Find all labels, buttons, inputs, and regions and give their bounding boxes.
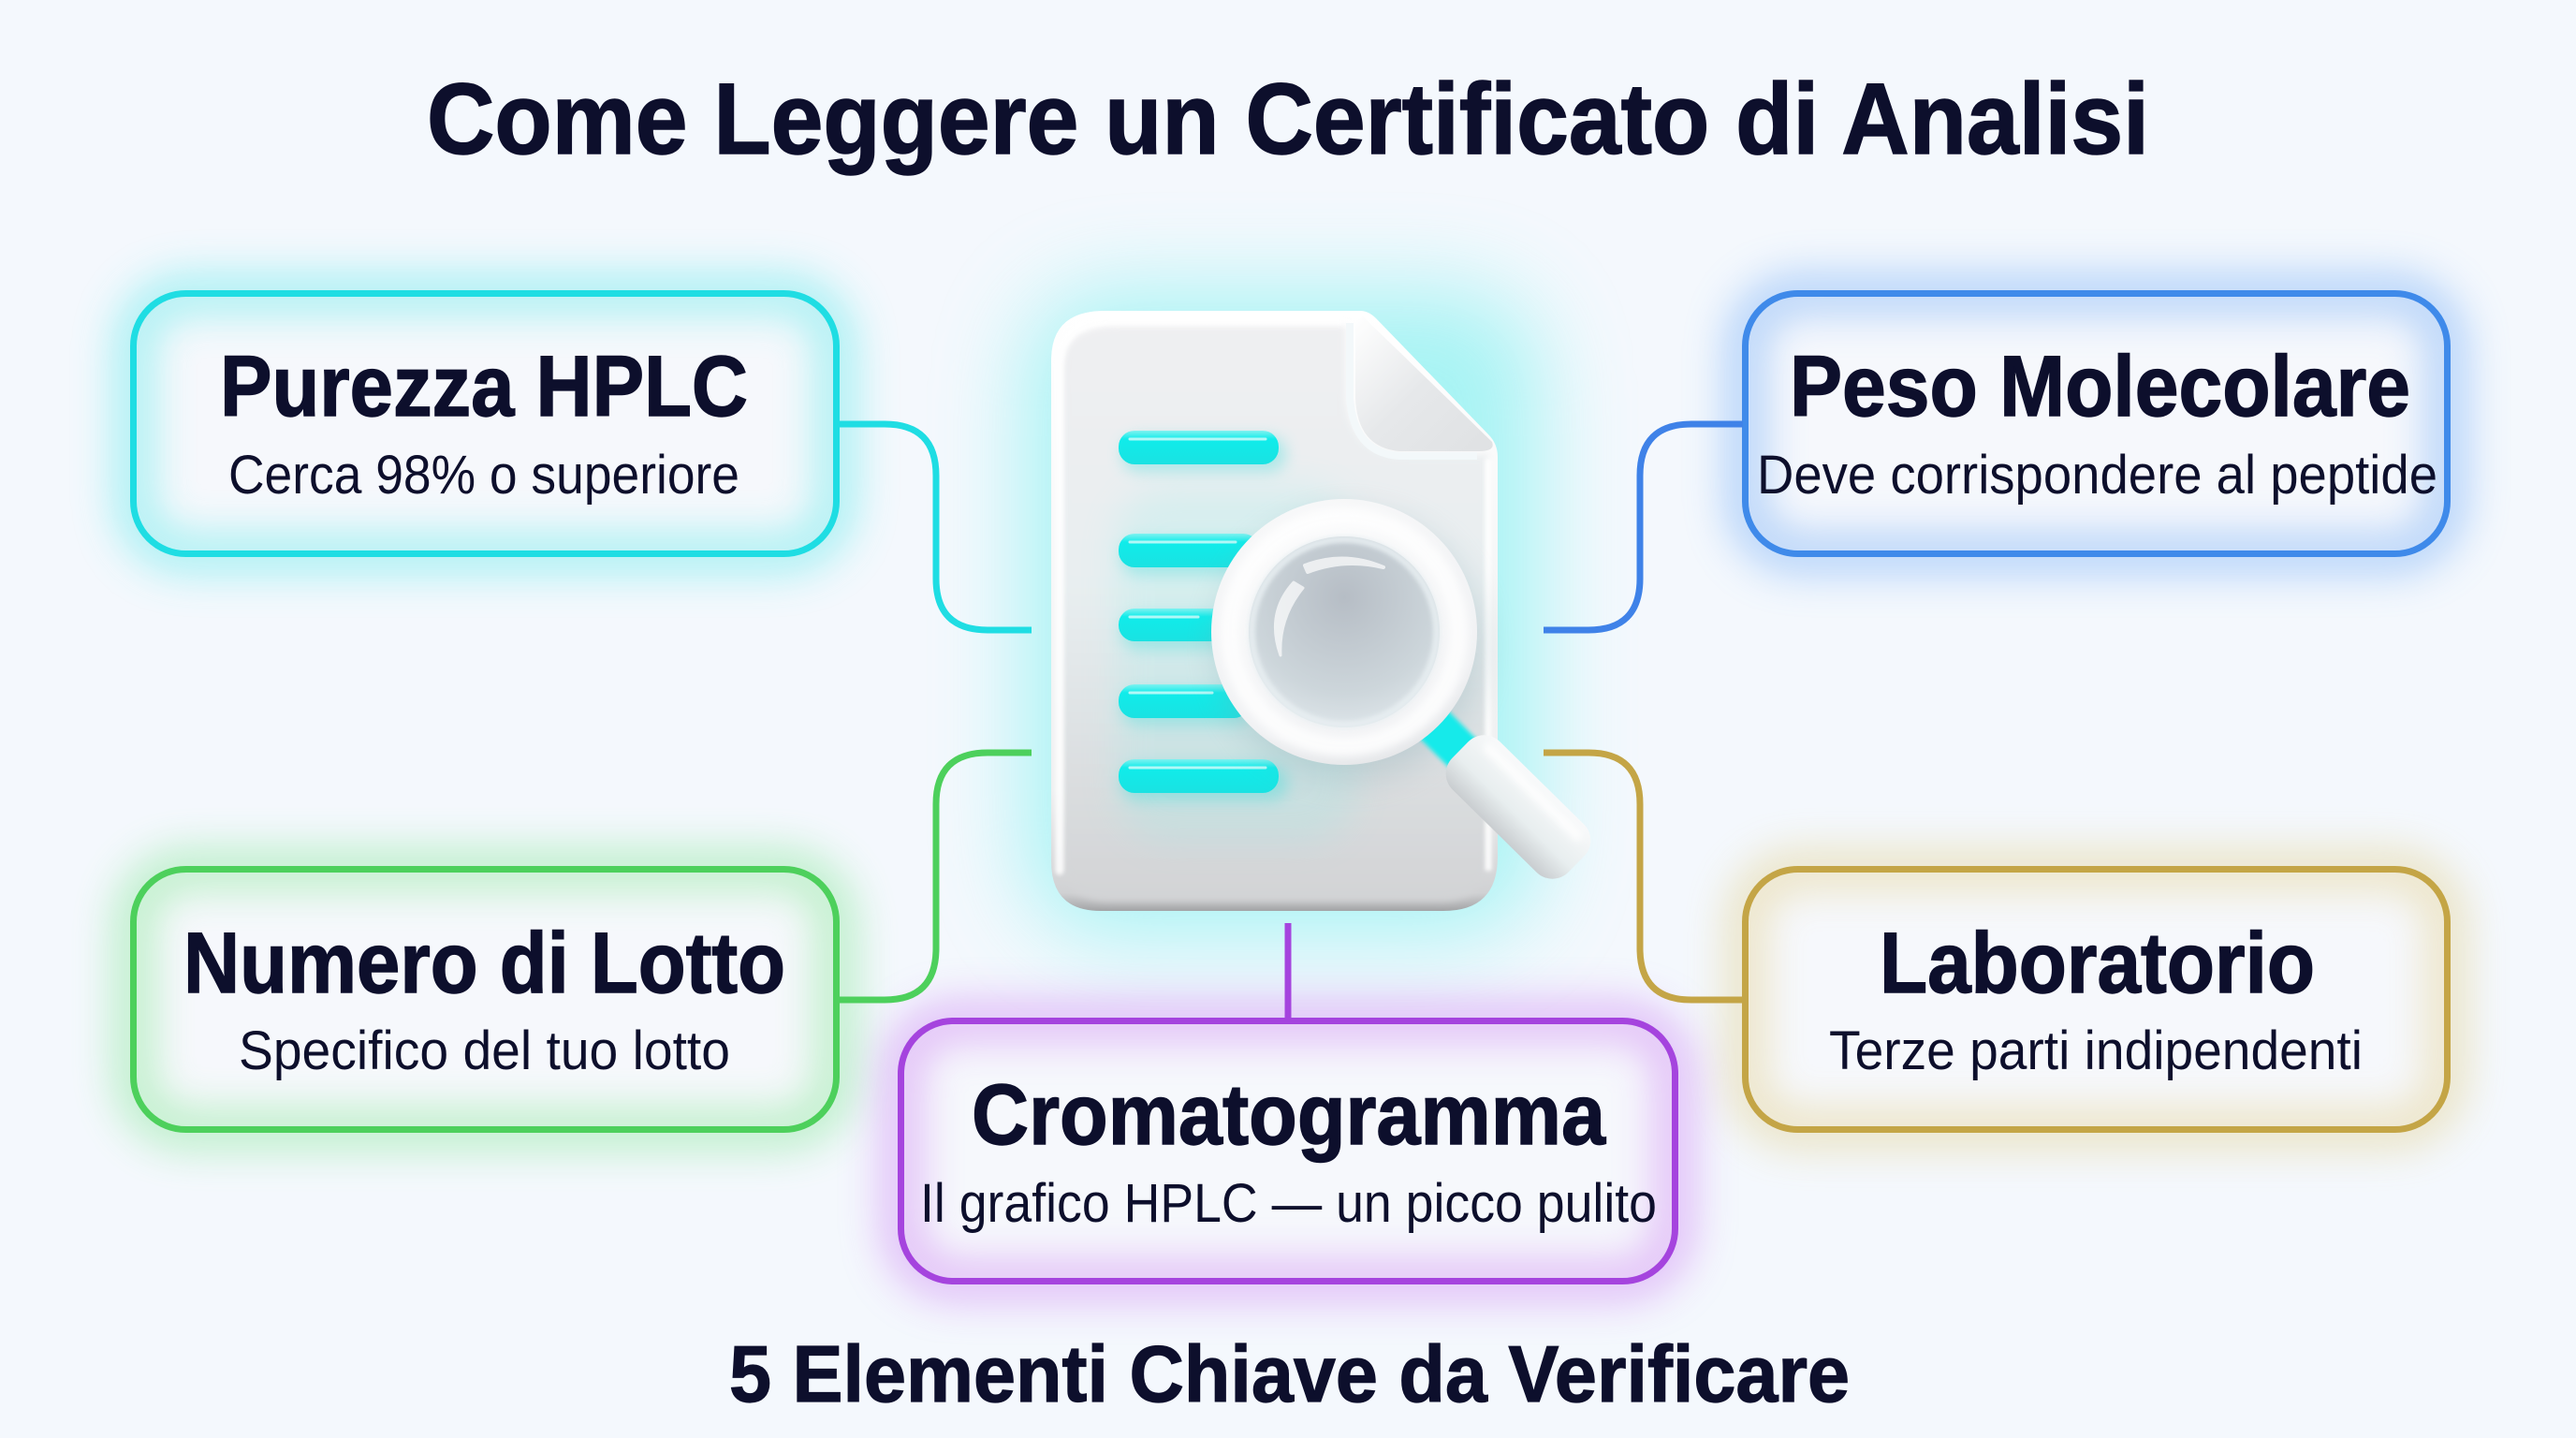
panel: Cromatogramma bbox=[900, 1020, 1676, 1281]
text: Specifico del tuo lotto: Specifico del tuo lotto bbox=[239, 1020, 730, 1081]
document body bbox=[1051, 311, 1498, 911]
magnifier handle bbox=[1437, 726, 1600, 888]
magnifier shadow bbox=[1217, 513, 1483, 779]
heading: Laboratorio: Laboratorio bbox=[1880, 916, 2315, 1011]
connector: Purezza HPLC bbox=[840, 424, 1032, 630]
panel: Numero di Lotto bbox=[133, 869, 837, 1129]
icon: document with magnifying glass bbox=[1051, 311, 1600, 911]
page fold bbox=[1355, 316, 1493, 451]
heading: Numero di Lotto: Numero di Lotto bbox=[183, 916, 785, 1011]
magnifier neck bbox=[1432, 723, 1466, 756]
subtitle: 5 Elementi Chiave da Verificare bbox=[729, 1330, 1850, 1419]
panel: Purezza HPLC bbox=[133, 294, 837, 554]
right highlight bbox=[1485, 459, 1492, 871]
connector: Laboratorio bbox=[1544, 753, 1743, 1000]
line 1 glow bbox=[1121, 436, 1286, 472]
text: Il grafico HPLC — un picco pulito: Il grafico HPLC — un picco pulito bbox=[920, 1173, 1657, 1234]
heading: Purezza HPLC: Purezza HPLC bbox=[220, 339, 748, 434]
document lines bbox=[1119, 431, 1288, 800]
connector: Numero di Lotto bbox=[840, 753, 1032, 1000]
panel: Peso Molecolare bbox=[1745, 294, 2447, 554]
heading: Cromatogramma: Cromatogramma bbox=[972, 1067, 1606, 1163]
left and top highlights bbox=[1060, 320, 1340, 871]
title: Come Leggere un Certificato di Analisi bbox=[427, 62, 2149, 175]
connector: Cromatogramma bbox=[1284, 923, 1292, 1018]
text: Deve corrispondere al peptide: Deve corrispondere al peptide bbox=[1757, 445, 2437, 506]
heading: Peso Molecolare: Peso Molecolare bbox=[1790, 339, 2410, 434]
text: Cerca 98% o superiore: Cerca 98% o superiore bbox=[228, 445, 739, 506]
panel: Laboratorio bbox=[1745, 869, 2447, 1129]
document face bbox=[1061, 326, 1488, 902]
connector: Peso Molecolare bbox=[1544, 424, 1743, 630]
text: Terze parti indipendenti: Terze parti indipendenti bbox=[1829, 1020, 2363, 1081]
magnifier ring bbox=[1211, 499, 1477, 765]
magnifier lens bbox=[1249, 536, 1440, 727]
lens highlights bbox=[1305, 558, 1383, 572]
central glow behind document bbox=[1025, 290, 1540, 936]
cyan tint on page bbox=[1114, 487, 1357, 843]
